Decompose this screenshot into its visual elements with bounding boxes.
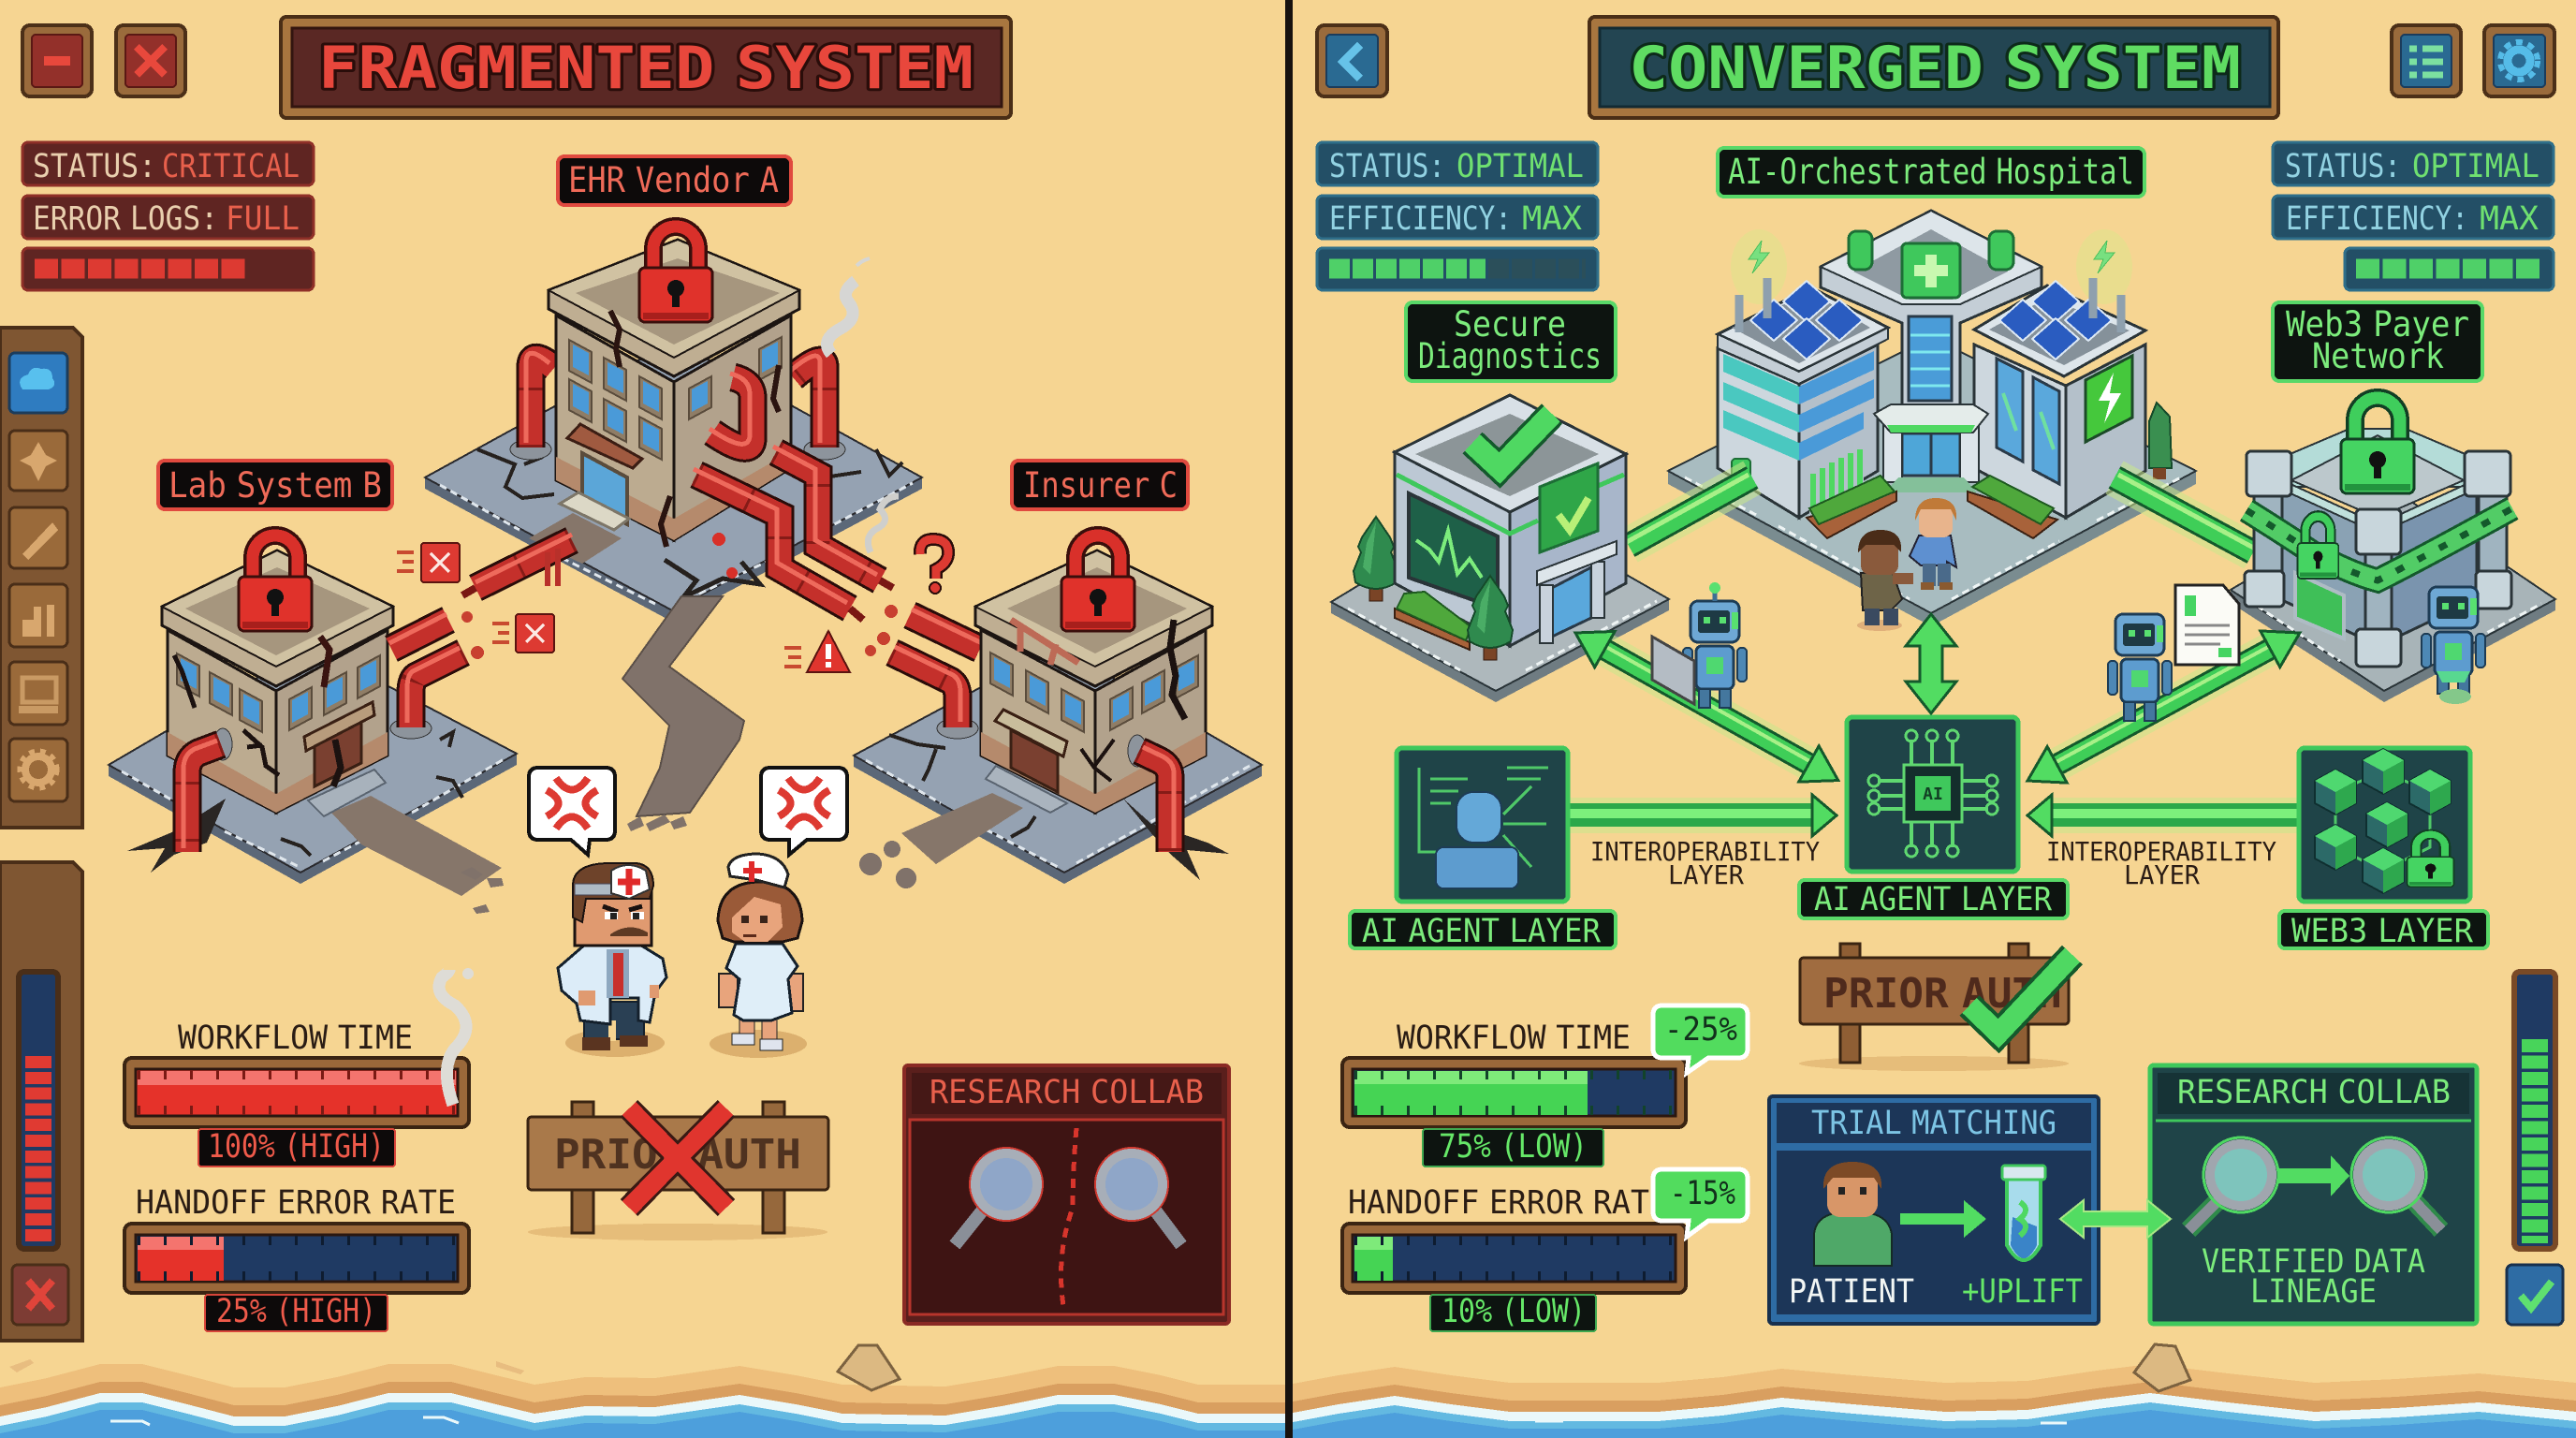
- metric: handoff error rate (converged): [1342, 1184, 1686, 1331]
- status panel: error logs: [22, 196, 314, 239]
- label: interoperability layer left: LAYER: [1668, 859, 1744, 890]
- test tube: [2002, 1166, 2045, 1260]
- building: secure diagnostics: [1331, 395, 1669, 702]
- sign: prior auth blocked: PRIOR AUTH: [554, 1131, 801, 1179]
- status panel left: optimal: OPTIMAL: [1456, 148, 1584, 185]
- metric: workflow time (converged): 75% (LOW): [1439, 1128, 1588, 1166]
- connector: hospital to diagnostics: [1625, 475, 1752, 546]
- label: interoperability layer right: [2046, 836, 2276, 890]
- panel: trial matching: [1769, 1096, 2099, 1324]
- robot hover shadow: [2439, 689, 2471, 704]
- sidebar: vertical gauge with close button: [0, 862, 82, 1341]
- character: nurse: [710, 854, 807, 1058]
- speech bubble: angry doctor: [529, 768, 615, 855]
- button: close: [116, 25, 185, 96]
- status panel: critical: [22, 142, 314, 185]
- panel: research collab (verified): VERIFIED DATA: [2202, 1243, 2425, 1281]
- title: fragmented system: FRAGMENTED SYSTEM: [318, 34, 973, 102]
- status panel: critical: CRITICAL: [162, 148, 300, 185]
- panel: trial matching: PATIENT: [1789, 1273, 1914, 1311]
- label: interoperability layer right: INTEROPERABILITY: [2046, 836, 2276, 867]
- metric: handoff error rate (converged): HANDOFF ERROR RAT: [1348, 1184, 1649, 1222]
- metric: workflow time (fragmented): [124, 1020, 469, 1167]
- title: converged system: CONVERGED SYSTEM: [1629, 34, 2241, 102]
- smoke from EHR: [827, 258, 870, 354]
- broken pipe debris: [461, 605, 898, 659]
- green check sign: [1540, 463, 1598, 552]
- title: fragmented system: [281, 17, 1011, 118]
- arrow: core to diagnostics: [1565, 615, 1849, 799]
- callout: minus 15 percent: -15%: [1670, 1175, 1735, 1212]
- document: [2175, 585, 2239, 665]
- right pipes: [390, 648, 463, 739]
- patient figure: [1814, 1162, 1892, 1266]
- wall pipe: [183, 728, 232, 852]
- arrow: trial matching to research collab: [2060, 1200, 2171, 1238]
- monitor: [1409, 493, 1498, 609]
- status panel left: efficiency: MAX: [1522, 200, 1582, 238]
- status panel left: progress: [1317, 248, 1598, 290]
- label: EHR Vendor A: EHR Vendor A: [568, 160, 779, 200]
- building: Insurer C: [854, 536, 1262, 888]
- icon: error tag: [492, 614, 554, 653]
- character: doctor: [558, 863, 666, 1057]
- status panel left: efficiency: [1317, 196, 1598, 239]
- callout: minus 15 percent: [1653, 1169, 1748, 1237]
- box: AI core chip: AI: [1923, 785, 1943, 804]
- metric: workflow time (fragmented): 100% (HIGH): [208, 1128, 385, 1166]
- status panel left: optimal: STATUS:: [1329, 148, 1445, 185]
- center divider line: [1285, 0, 1293, 1438]
- button: confirm check: [2507, 1265, 2563, 1325]
- sign: prior auth approved: PRIOR AUTH: [1823, 970, 2062, 1018]
- status panel right: efficiency: [2273, 196, 2554, 239]
- status panel: error logs: FULL: [226, 200, 300, 238]
- sign: prior auth approved: [1799, 944, 2072, 1071]
- icon: error tag: [397, 543, 460, 582]
- status panel right: optimal: STATUS:: [2285, 148, 2401, 185]
- button: settings gear: [2484, 25, 2554, 96]
- panel: research collab (broken): [904, 1065, 1229, 1324]
- label: secure diagnostics: [1406, 302, 1616, 381]
- label: AI-orchestrated hospital: AI-Orchestrated Hospital: [1728, 152, 2134, 192]
- smoke over workflow bar: [439, 968, 474, 1105]
- people shaking hands: [1857, 498, 1956, 631]
- connector: hospital to web3: [2115, 475, 2257, 552]
- status panel right: efficiency: EFFICIENCY:: [2286, 200, 2468, 238]
- callout: minus 25 percent: -25%: [1664, 1011, 1737, 1049]
- icon: question mark: [920, 539, 948, 594]
- entrance: [1552, 567, 1591, 637]
- right beach rock: [2134, 1344, 2190, 1391]
- label: interoperability layer left: INTEROPERABILITY: [1590, 836, 1820, 867]
- gauge: right vertical: [2514, 972, 2555, 1249]
- status panel left: efficiency: EFFICIENCY:: [1329, 200, 1512, 238]
- hospital planters: [1807, 476, 2057, 538]
- label: web3 payer network: Web3 Payer: [2286, 304, 2469, 345]
- callout: minus 25 percent: [1653, 1005, 1748, 1073]
- magnifier right: [1095, 1148, 1181, 1245]
- status panel right: optimal: [2273, 142, 2554, 185]
- arrow: web3 layer to core: [2027, 795, 2297, 836]
- box: AI agent layer icon: [1397, 748, 1568, 902]
- label: AI agent layer: AI AGENT LAYER: [1362, 913, 1602, 950]
- metric: workflow time (converged): [1342, 1020, 1686, 1167]
- label: interoperability layer right: LAYER: [2124, 859, 2200, 890]
- wall pipe: [710, 374, 753, 448]
- title: converged system: [1589, 17, 2278, 118]
- arrow: agent layer to core: [1570, 795, 1837, 836]
- green chain: [2247, 508, 2512, 580]
- metric: handoff error rate (fragmented): [124, 1184, 469, 1331]
- magnifier left: [2188, 1137, 2278, 1230]
- robot: hovering agent: [2422, 587, 2485, 694]
- smoke from broken pipe: [868, 496, 899, 552]
- antenna glow: [1731, 229, 2132, 304]
- status panel right: progress: [2345, 248, 2554, 290]
- shoreline waves: [0, 1359, 2576, 1438]
- label: secure diagnostics: Diagnostics: [1418, 336, 1602, 376]
- status panel: critical: STATUS:: [33, 148, 156, 185]
- sidebar: tool icons: [0, 328, 82, 828]
- solar panels: [1750, 281, 2112, 360]
- label: Lab System B: Lab System B: [168, 465, 382, 506]
- metric: handoff error rate (fragmented): HANDOFF ERROR RATE: [136, 1184, 456, 1222]
- big check mark: [1472, 414, 1552, 468]
- status panel: error logs: ERROR LOGS:: [33, 200, 218, 238]
- entrance: [1902, 433, 1960, 476]
- left wing: [1718, 287, 1888, 521]
- wall pipe: [1128, 735, 1174, 852]
- label: web3 payer network: [2273, 302, 2482, 381]
- panel: trial matching: +UPLIFT: [1962, 1273, 2083, 1311]
- label: interoperability layer left: [1590, 836, 1820, 890]
- box: AI core chip: [1847, 717, 2018, 872]
- robot: laptop agent: [1652, 582, 1747, 708]
- label: secure diagnostics: Secure: [1454, 304, 1566, 345]
- building: Lab System B: [109, 536, 517, 914]
- stone pillars: [2254, 494, 2507, 629]
- arrow: hospital to agent core: [1906, 614, 1956, 713]
- label: Insurer C: Insurer C: [1023, 465, 1178, 506]
- left pipes: [892, 609, 982, 739]
- label: AI agent layer center: AI AGENT LAYER: [1814, 881, 2053, 918]
- building: AI-orchestrated hospital: [1668, 211, 2196, 626]
- broken front pipes: [462, 447, 893, 620]
- panel: research collab (verified): LINEAGE: [2250, 1273, 2377, 1311]
- arrow: core to web3 network: [2018, 615, 2309, 799]
- status panel right: optimal: OPTIMAL: [2412, 148, 2539, 185]
- box: web3 layer icon: [2299, 748, 2470, 902]
- magnifier right: [2351, 1137, 2441, 1230]
- metric: handoff error rate (fragmented): 25% (HIGH): [216, 1293, 376, 1330]
- button: minimize: [22, 25, 92, 96]
- building: web3 payer network: [2231, 398, 2555, 702]
- panel: research collab (verified): RESEARCH COLLAB: [2177, 1074, 2451, 1111]
- building: EHR Vendor A: [425, 227, 922, 622]
- panel: trial matching: TRIAL MATCHING: [1811, 1105, 2056, 1142]
- speech bubble: angry nurse: [761, 768, 847, 855]
- sign: prior auth blocked: [528, 1102, 828, 1240]
- label: web3 layer: WEB3 LAYER: [2291, 913, 2474, 950]
- broken upper pipe: [389, 614, 448, 649]
- status panel right: efficiency: MAX: [2480, 200, 2539, 238]
- metric: workflow time (fragmented): WORKFLOW TIME: [178, 1020, 413, 1057]
- metric: handoff error rate (converged): 10% (LOW): [1442, 1293, 1586, 1330]
- left beach rock: [838, 1345, 900, 1390]
- metric: workflow time (converged): WORKFLOW TIME: [1397, 1020, 1631, 1057]
- robot: document agent: [2108, 614, 2172, 721]
- back pipes: [510, 353, 845, 460]
- button: list: [2392, 25, 2461, 96]
- icon: warning triangle: [784, 631, 850, 672]
- panel: research collab (verified): [2150, 1065, 2477, 1324]
- label: web3 payer network: Network: [2312, 336, 2444, 376]
- right wing: [1974, 286, 2172, 518]
- roof cross sign: [1902, 243, 1960, 298]
- status panel left: optimal: [1317, 142, 1598, 185]
- magnifier left: [955, 1148, 1043, 1245]
- cracked road from EHR vendor: [622, 596, 744, 831]
- panel: research collab (broken): RESEARCH COLLAB: [929, 1074, 1204, 1111]
- status panel: health bar: [22, 248, 314, 290]
- button: back: [1317, 25, 1387, 96]
